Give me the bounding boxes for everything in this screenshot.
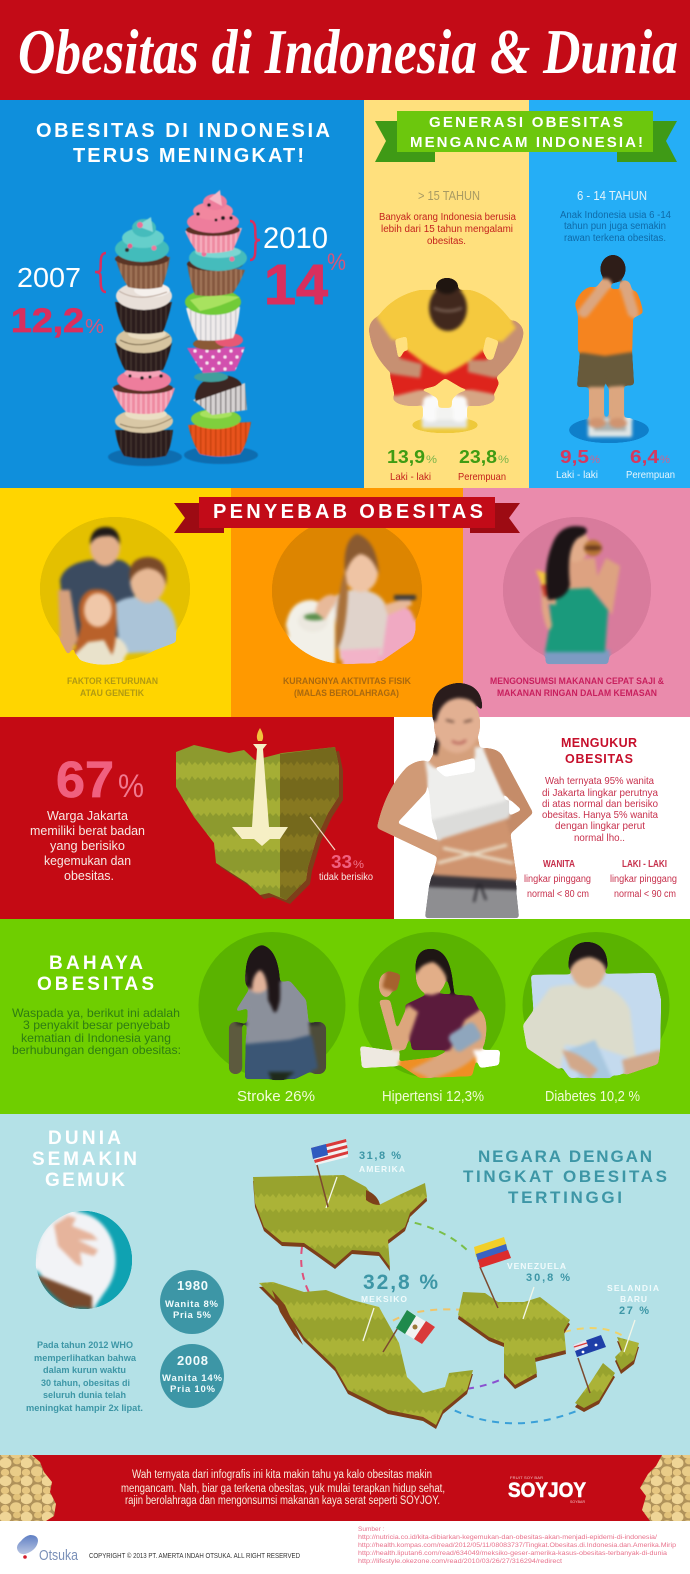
figure: boy on scale (569, 255, 649, 443)
stat: dewasa perempuan (458, 447, 509, 483)
label: amerika (359, 1150, 405, 1174)
text: adult description (379, 212, 516, 247)
decoration: soybeans left (0, 1455, 56, 1521)
text: ajakan: Wah ternyata dari infografis ini kita makin tahu ya kalo obesitas makin (132, 1469, 432, 1481)
stat: anak laki-laki: 9,5 (560, 447, 589, 467)
heading: bahaya obesitas: OBESITAS (37, 974, 154, 995)
label: amerika: 31,8 % (359, 1150, 401, 1162)
figure: woman on scale (369, 278, 523, 433)
label: selandia baru: 27 % (619, 1305, 649, 1317)
text: warga jakarta: obesitas. (64, 869, 114, 883)
circle: diabetes (522, 932, 670, 1078)
stat 2007: 12,2 (11, 302, 84, 340)
caption: makanan cepat saji: MAKANAN RINGAN DALAM KEMASAN (497, 688, 657, 699)
panel: soyjoy callout (0, 1455, 690, 1521)
map: amerika (253, 1139, 427, 1271)
text: who 2012: meningkat hampir 2x lipat. (26, 1403, 143, 1414)
caption: kurangnya aktivitas fisik: (MALAS BEROLAHRAGA) (294, 688, 399, 699)
text: penjelasan lingkar perut: obesitas. Hanya 5% wanita (542, 809, 658, 821)
map: jakarta with monument (176, 728, 343, 904)
stat 2007: % (85, 316, 104, 338)
copyright: COPYRIGHT © 2013 PT. AMERTA INDAH OTSUKA. ALL RIGHT RESERVED (89, 1551, 300, 1560)
age heading > 15 tahun: > 15 TAHUN (418, 189, 480, 203)
heading: mengukur obesitas: OBESITAS (565, 752, 633, 766)
callout: 33 percent tidak berisiko (310, 817, 373, 883)
circle photo: girl on sofa (272, 518, 422, 664)
text: who 2012: memperlihatkan bahwa (34, 1353, 137, 1364)
heading: dunia semakin gemuk: SEMAKIN (32, 1149, 137, 1170)
sources: http://health.kompas.com/read/2012/05/11/08083737/Tingkat.Obesitas.di.Indonesia.dan.Amerika.Mirip (358, 1542, 676, 1549)
panel: faktor keturunan (0, 488, 231, 717)
text: waspada: kematian di Indonesia yang (21, 1031, 171, 1045)
stat: 67 percent: % (118, 768, 144, 804)
circle photo: woman eating (503, 517, 651, 664)
text: ajakan: mengancam. Nah, biar ga terkena obesitas, yuk mulai terapkan hidup sehat, (121, 1483, 445, 1495)
ribbon: penyebab obesitas: PENYEBAB OBESITAS (213, 501, 483, 523)
stat 2010 (250, 221, 346, 317)
callout: 33 percent tidak berisiko: % (353, 859, 364, 871)
panel: obesitas di indonesia (0, 100, 364, 488)
label: venezuela: VENEZUELA (507, 1261, 566, 1271)
panel: generasi obesitas dewasa (364, 100, 529, 488)
badge: 1980: 1980 (177, 1278, 208, 1293)
logo: soyjoy: FRUIT SOY BAR (510, 1475, 543, 1480)
figure: woman in wheelchair (229, 945, 326, 1080)
heading: negara dengan tingkat obesitas tertinggi (463, 1147, 667, 1207)
heading: obesitas di indonesia terus meningkat: OBESITAS DI INDONESIA (36, 120, 330, 142)
stat: dewasa perempuan: % (498, 454, 509, 466)
age heading 6-14 tahun: 6 - 14 TAHUN (577, 189, 647, 203)
text: penjelasan lingkar perut (542, 775, 658, 844)
map: venezuela (458, 1237, 570, 1389)
text: penjelasan lingkar perut: di Jakarta lingkar perutnya (542, 787, 658, 799)
label: stroke: Stroke 26% (237, 1089, 315, 1105)
caption: kurangnya aktivitas fisik (283, 676, 411, 699)
text: adult description: Banyak orang Indonesia berusia (379, 212, 516, 223)
panel: footer (0, 1521, 690, 1574)
flag: amerika (311, 1139, 348, 1165)
heading: dunia semakin gemuk: DUNIA (48, 1128, 121, 1149)
logo: soyjoy: SOYBAR (570, 1500, 585, 1504)
logo: otsuka: Otsuka (39, 1547, 79, 1564)
panel: makanan cepat saji (463, 488, 690, 717)
logo: otsuka (17, 1535, 79, 1564)
table: laki-laki: lingkar pinggang (610, 874, 677, 885)
stat: dewasa perempuan: Perempuan (458, 471, 506, 483)
text: who 2012: seluruh dunia telah (43, 1390, 126, 1401)
caption: faktor keturunan (67, 676, 158, 699)
figure: woman measuring waist (377, 683, 533, 918)
text: warga jakarta: Warga Jakarta (47, 809, 128, 823)
circle photo: family (40, 517, 190, 665)
table: laki-laki: normal < 90 cm (614, 889, 676, 900)
dashed connector arcs (301, 1220, 625, 1423)
stat: 67 percent: 67 (56, 751, 114, 808)
sources: http://nutricia.co.id/kita-dibiarkan-kegemukan-dan-obesitas-akan-menjadi-epidemi-di-indonesia/ (358, 1534, 657, 1541)
stat: anak perempuan (626, 447, 675, 481)
text: who 2012: Pada tahun 2012 WHO (37, 1340, 133, 1351)
circle: stroke (198, 932, 346, 1080)
text: penjelasan lingkar perut: di atas normal dan berisiko (542, 798, 658, 810)
text: warga jakarta (30, 809, 145, 883)
badge: 1980 (160, 1270, 224, 1334)
text: who 2012: 30 tahun, obesitas di (41, 1378, 130, 1389)
stat: anak perempuan: % (660, 454, 670, 466)
badge: 2008: Wanita 14% (162, 1373, 223, 1384)
text: waspada (12, 1006, 181, 1057)
stat 2010: 14 (264, 253, 328, 317)
heading: obesitas di indonesia terus meningkat (36, 120, 330, 167)
label: meksiko: 32,8 % (363, 1271, 438, 1294)
text: waspada: Waspada ya, berikut ini adalah (12, 1006, 180, 1020)
label: diabetes: Diabetes 10,2 % (545, 1089, 640, 1105)
heading: negara dengan tingkat obesitas tertinggi: TINGKAT OBESITAS (463, 1167, 667, 1186)
stat 2007: 2007 (17, 262, 81, 293)
text: child description: Anak Indonesia usia 6 -14 (560, 210, 671, 221)
text: warga jakarta: memiliki berat badan (30, 824, 145, 838)
text: child description: rawan terkena obesitas. (564, 233, 666, 244)
panel: bahaya obesitas (0, 919, 690, 1114)
text: penjelasan lingkar perut: Wah ternyata 95% wanita (545, 775, 654, 787)
label: amerika: AMERIKA (359, 1164, 405, 1174)
photo: belly circle (36, 1211, 132, 1309)
sources: Sumber : (358, 1526, 385, 1533)
text: warga jakarta: kegemukan dan (44, 854, 131, 868)
text: child description (560, 210, 671, 244)
label: venezuela: 30,8 % (526, 1272, 570, 1284)
text: child description: tahun pun juga semakin (564, 221, 666, 232)
stat 2010: 2010 (263, 222, 328, 255)
flag: australia (573, 1335, 606, 1357)
text: warga jakarta: yang berisiko (50, 839, 125, 853)
heading: mengukur obesitas: MENGUKUR (561, 736, 637, 750)
stat: dewasa laki-laki: % (426, 454, 437, 466)
heading: negara dengan tingkat obesitas tertinggi: NEGARA DENGAN (478, 1147, 652, 1166)
callout: 33 percent tidak berisiko: 33 (331, 852, 352, 872)
text: ajakan: rajin berolahraga dan mengonsumsi makanan kaya serat seperti SOYJOY. (125, 1495, 440, 1507)
logo: soyjoy: SOYJOY (508, 1479, 586, 1502)
heading: dunia semakin gemuk (32, 1128, 137, 1191)
stat 2007 (11, 253, 106, 340)
panel: dunia semakin gemuk (0, 1114, 690, 1455)
stat: anak laki-laki: % (590, 454, 600, 466)
panel: warga jakarta (0, 717, 394, 919)
figure: woman with blood pressure cuff (360, 949, 500, 1078)
table: wanita: lingkar pinggang (524, 874, 591, 885)
table: laki-laki: LAKI - LAKI (622, 859, 667, 870)
caption: faktor keturunan: ATAU GENETIK (80, 688, 144, 699)
ribbon: generasi obesitas mengancam indonesia (375, 111, 677, 162)
badge: 2008: 2008 (177, 1353, 208, 1368)
heading: bahaya obesitas (37, 953, 154, 995)
table: wanita: normal < 80 cm (527, 889, 589, 900)
stat: anak perempuan: Perempuan (626, 469, 675, 481)
caption: faktor keturunan: FAKTOR KETURUNAN (67, 676, 158, 687)
stat: 67 percent (56, 751, 144, 808)
text: who 2012: dalam kurun waktu (43, 1365, 126, 1376)
label: meksiko: MEKSIKO (361, 1294, 407, 1304)
label: selandia baru: BARU (620, 1294, 647, 1304)
sources: http://lifestyle.okezone.com/read/2010/03/26/27/316294/redirect (358, 1558, 562, 1565)
badge: 2008: Pria 10% (170, 1384, 216, 1395)
panel: generasi obesitas anak (529, 100, 690, 488)
stat: anak laki-laki: Laki - laki (556, 469, 598, 481)
badge: 2008 (160, 1344, 224, 1408)
label: selandia baru: SELANDIA (607, 1283, 659, 1293)
text: waspada: 3 penyakit besar penyebab (23, 1018, 170, 1032)
flag: meksiko (396, 1310, 435, 1344)
table: wanita (524, 859, 591, 900)
text: waspada: berhubungan dengan obesitas: (12, 1043, 181, 1057)
cupcake stack 2007 (108, 217, 182, 466)
badge: 1980: Pria 5% (173, 1310, 212, 1321)
ribbon: generasi obesitas mengancam indonesia: MENGANCAM INDONESIA! (410, 134, 643, 151)
label: hipertensi: Hipertensi 12,3% (382, 1089, 484, 1105)
heading: dunia semakin gemuk: GEMUK (45, 1170, 125, 1191)
stat: anak perempuan: 6,4 (630, 447, 659, 467)
figure: boy in hospital bed (523, 942, 661, 1078)
heading: bahaya obesitas: BAHAYA (49, 953, 143, 974)
table: laki-laki (610, 859, 677, 900)
stat: dewasa perempuan: 23,8 (459, 447, 497, 467)
sources (358, 1526, 676, 1565)
header banner (0, 0, 690, 100)
circle: hipertensi (358, 932, 506, 1078)
panel: mengukur obesitas (377, 683, 690, 919)
label: selandia baru (607, 1283, 659, 1317)
stat: dewasa laki-laki (387, 447, 437, 483)
label: meksiko (361, 1271, 438, 1304)
table: wanita: WANITA (543, 859, 575, 870)
decoration: soybeans right (640, 1455, 690, 1521)
label: venezuela (507, 1261, 570, 1284)
cupcake stack 2010 (184, 190, 258, 464)
caption: makanan cepat saji (490, 676, 664, 699)
ribbon: penyebab obesitas (174, 497, 520, 533)
stat: anak laki-laki (556, 447, 600, 481)
panel: kurang aktivitas fisik (231, 488, 463, 717)
map: meksiko (259, 1282, 473, 1429)
heading: negara dengan tingkat obesitas tertinggi: TERTINGGI (508, 1188, 622, 1207)
caption: kurangnya aktivitas fisik: KURANGNYA AKTIVITAS FISIK (283, 676, 411, 687)
heading: obesitas di indonesia terus meningkat: TERUS MENINGKAT! (73, 145, 304, 167)
stat: dewasa laki-laki: 13,9 (387, 447, 425, 467)
badge: 1980: Wanita 8% (165, 1299, 219, 1310)
heading: mengukur obesitas (561, 736, 637, 766)
stats: generasi obesitas (387, 447, 675, 483)
text: who 2012 (26, 1340, 143, 1414)
stat: dewasa laki-laki: Laki - laki (390, 471, 431, 483)
map: selandia baru (573, 1320, 639, 1412)
text: ajakan (121, 1469, 445, 1507)
text: adult description: obesitas. (427, 236, 466, 247)
ribbon: generasi obesitas mengancam indonesia: GENERASI OBESITAS (429, 114, 623, 131)
sources: http://health.liputan6.com/read/634049/meksiko-geser-amerika-kasus-obesitas-terbanyak-di-dunia (358, 1550, 667, 1557)
text: adult description: lebih dari 15 tahun mengalami (381, 224, 513, 235)
text: penjelasan lingkar perut: dengan lingkar perut (555, 820, 645, 832)
callout: 33 percent tidak berisiko: tidak berisiko (319, 872, 373, 883)
text: penjelasan lingkar perut: normal lho.. (574, 832, 625, 844)
stat 2010: % (327, 249, 346, 276)
caption: makanan cepat saji: MENGONSUMSI MAKANAN CEPAT SAJI & (490, 676, 664, 687)
flag: venezuela (474, 1237, 511, 1268)
